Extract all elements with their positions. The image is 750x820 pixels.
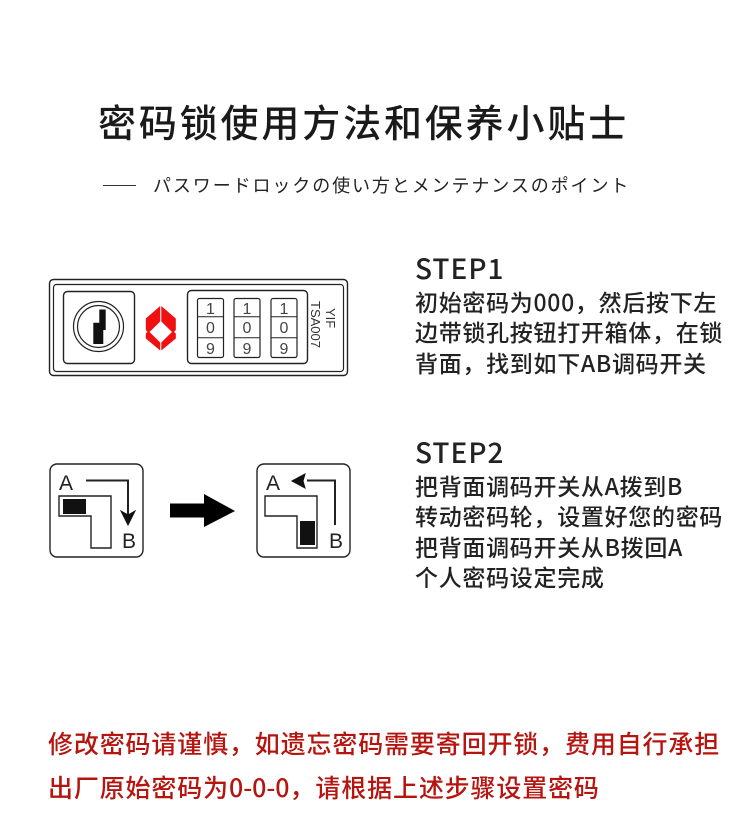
icon: switch at position B: A xyxy=(266,472,280,495)
step 1 text xyxy=(415,284,723,379)
step 1 heading: STEP1 xyxy=(415,248,504,288)
step 1 text: 边带锁孔按钮打开箱体，在锁 xyxy=(415,314,723,348)
step 2 text: 转动密码轮，设置好您的密码 xyxy=(415,498,723,532)
step 2 text: 把背面调码开关从A拨到B xyxy=(415,468,683,502)
step 2 heading: STEP2 xyxy=(415,432,504,472)
icon: switch at position B xyxy=(256,463,351,558)
model text: TSA007 xyxy=(308,301,323,348)
model text: YIF xyxy=(323,308,338,328)
step 2 text xyxy=(415,468,723,593)
icon: red diamond logo xyxy=(146,306,176,350)
step 2 text: 把背面调码开关从B拨回A xyxy=(415,529,683,563)
warning note xyxy=(48,725,720,805)
icon: switch at position B: B xyxy=(329,530,343,553)
number wheels: 0 xyxy=(206,320,215,337)
number wheels: 1 xyxy=(280,301,289,318)
number wheels: 1 xyxy=(243,301,252,318)
warning note: 出厂原始密码为0-0-0，请根据上述步骤设置密码 xyxy=(48,769,600,805)
step 2 text: 个人密码设定完成 xyxy=(415,559,605,593)
number wheels: 9 xyxy=(280,341,289,358)
title: 密码锁使用方法和保养小贴士 xyxy=(98,93,629,148)
icon: switch at position A xyxy=(49,463,144,558)
model text xyxy=(308,301,338,348)
number wheels: 9 xyxy=(243,341,252,358)
number wheels xyxy=(188,290,308,364)
key cylinder xyxy=(64,292,134,364)
arrow: right xyxy=(170,494,235,527)
step 1 text: 背面，找到如下AB调码开关 xyxy=(415,345,707,379)
number wheels: 0 xyxy=(280,320,289,337)
number wheels: 9 xyxy=(206,341,215,358)
number wheels: 0 xyxy=(243,320,252,337)
warning note: 修改密码请谨慎，如遗忘密码需要寄回开锁，费用自行承担 xyxy=(48,725,720,761)
icon: switch at position A: A xyxy=(59,472,73,495)
subtitle with lead line: パスワードロックの使い方とメンテナンスのポイント xyxy=(153,172,630,198)
icon: switch at position A: B xyxy=(122,530,136,553)
step 1 text: 初始密码为000，然后按下左 xyxy=(415,284,717,318)
number wheels: 1 xyxy=(206,301,215,318)
icon: combination lock xyxy=(48,278,348,376)
